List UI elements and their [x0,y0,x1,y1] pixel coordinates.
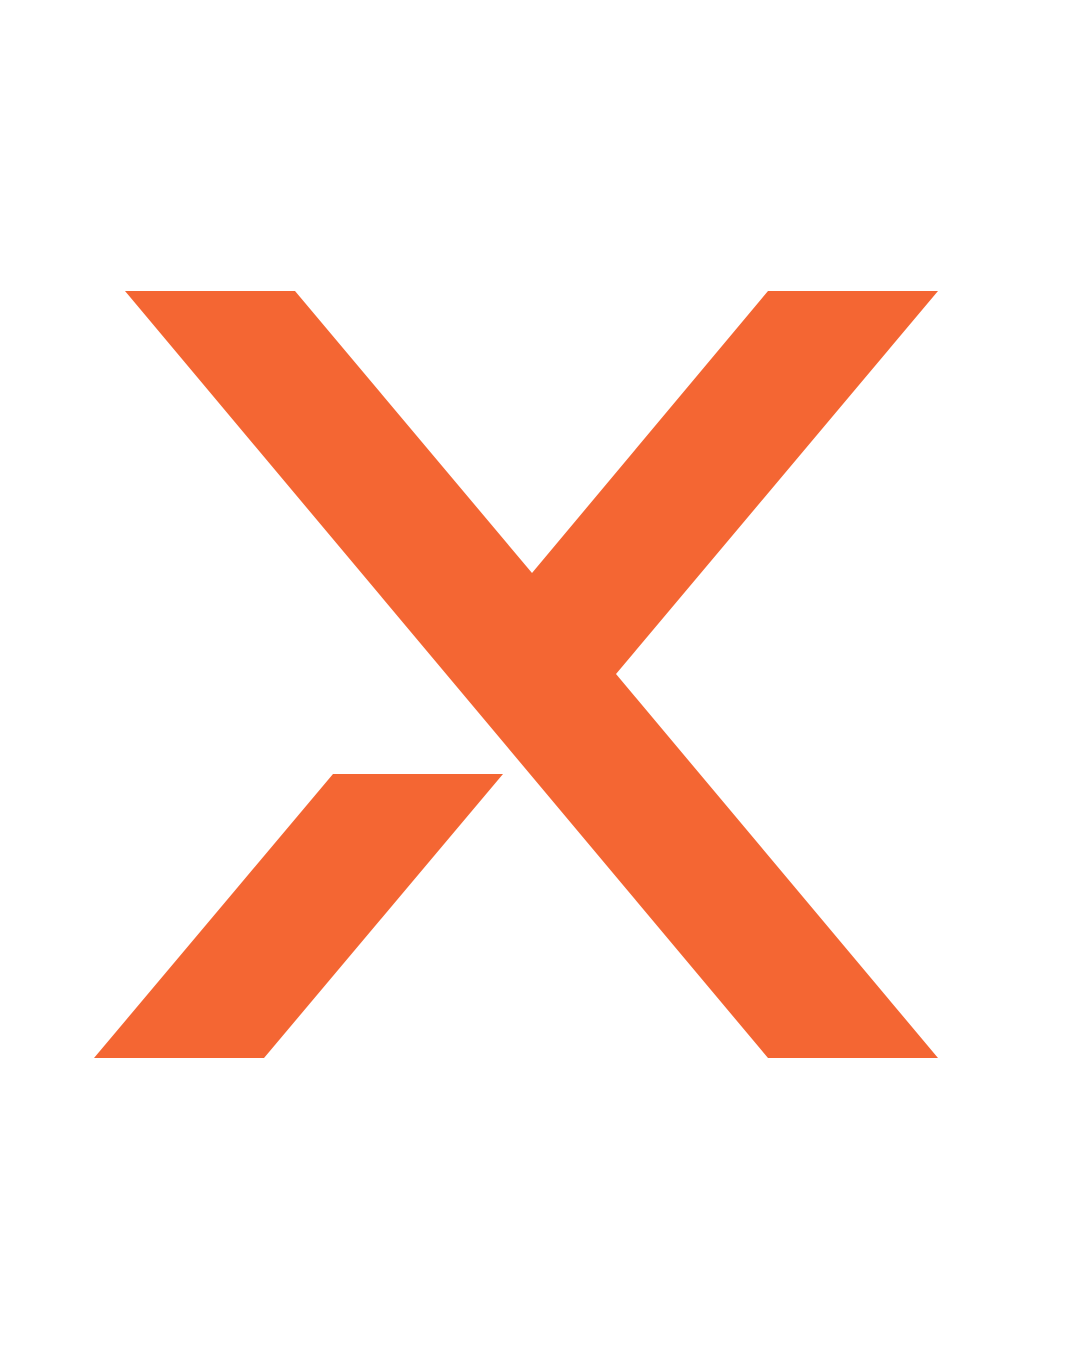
icon: main diagonal stroke with upper right arm [125,291,938,1058]
icon: lower left arm [94,774,503,1058]
logo: orange X mark [94,291,938,1058]
